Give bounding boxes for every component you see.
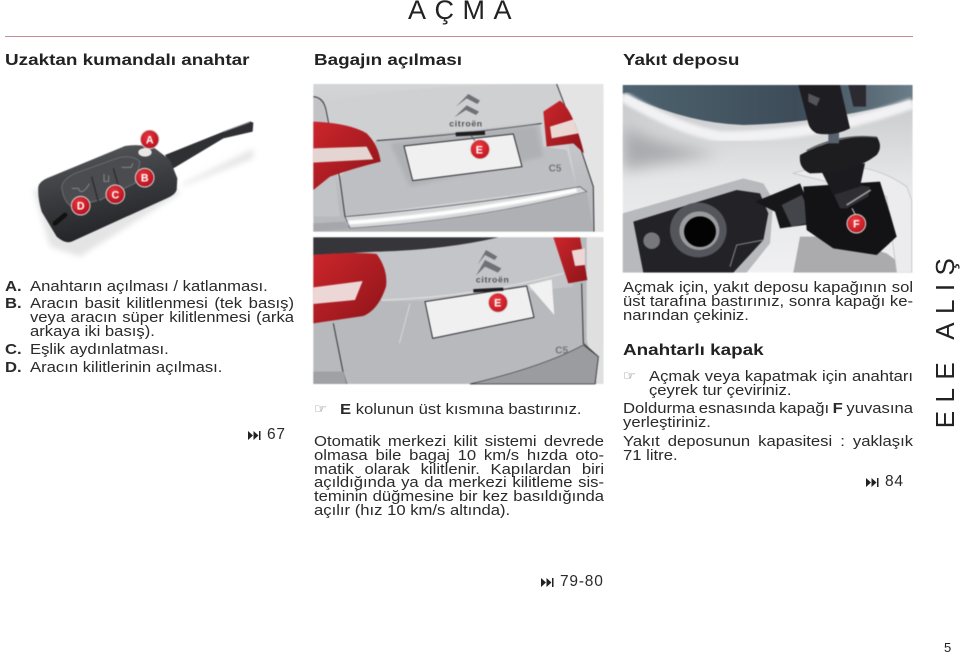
page reference: 67: 67 [267,426,286,443]
page reference: 67 [248,426,286,443]
heading: key cap: Anahtarlı kapak [623,342,764,359]
heading: fuel tank: Yakıt deposu [623,52,739,69]
instruction: press E lever: ☞ [314,402,327,417]
page reference: 79-80 [541,573,604,590]
page reference: 84 [866,473,904,490]
illustration: boot handle, view 2 [312,236,604,386]
illustration: remote key fob [34,120,254,257]
illustration: remote key fob: B [141,173,149,185]
text block: key functions list: C. [5,341,22,358]
text block: key functions list: Anahtarın açılması / katlanması. [30,278,268,295]
text block: automatic locking: açılır (hız 10 km/s altında). [314,502,510,519]
illustration: remote key fob: D [77,201,85,213]
illustration: boot handle, view 2: C5 [555,345,568,356]
page number: 5 [944,640,951,655]
text block: tank capacity: 71 litre. [623,447,678,464]
text block: refuelling: yerleştiriniz. [623,414,711,431]
page reference: 84: 84 [885,473,904,490]
illustration: boot handle, view 2: citroën [476,275,509,285]
heading: remote key: Uzaktan kumandalı anahtar [5,52,249,69]
text block: key functions list: B. [5,295,22,312]
illustration: remote key fob: C [111,189,119,201]
heading: boot opening: Bagajın açılması [314,52,462,69]
illustration: fuel filler cap with key: F [853,219,860,231]
illustration: boot handle, view 1: C5 [549,164,562,175]
text block: key functions list: arkaya iki basış). [30,323,155,340]
page reference: 79-80: 79-80 [560,573,604,590]
instruction: press E lever: E kolunun üst kısmına bastırınız. [340,401,582,418]
text block: fuel opening [623,280,913,324]
text block: automatic locking [314,434,604,519]
text block: key functions list [5,278,294,376]
text block: key functions list: Eşlik aydınlatması. [30,341,169,358]
illustration: boot handle, view 1: E [476,144,483,156]
illustration: fuel filler cap with key [622,84,914,274]
text block: fuel opening: narından çekiniz. [623,307,749,324]
text block: refuelling [623,401,913,431]
text block: key functions list: A. [5,278,22,295]
illustration: boot handle, view 1: citroën [449,119,483,129]
text block: key functions list: D. [5,359,22,376]
illustration: remote key fob: A [146,134,154,146]
side section label: ELE ALIŞ [930,250,960,428]
text block: key functions list: Aracın kilitlerinin açılması. [30,359,222,376]
instruction: quarter turn [623,369,913,399]
text block: tank capacity [623,434,913,464]
illustration: boot handle, view 1 [312,83,604,232]
illustration: boot handle, view 2: E [494,298,501,310]
instruction: quarter turn: ☞ [623,369,636,384]
instruction: quarter turn: çeyrek tur çeviriniz. [649,382,791,399]
